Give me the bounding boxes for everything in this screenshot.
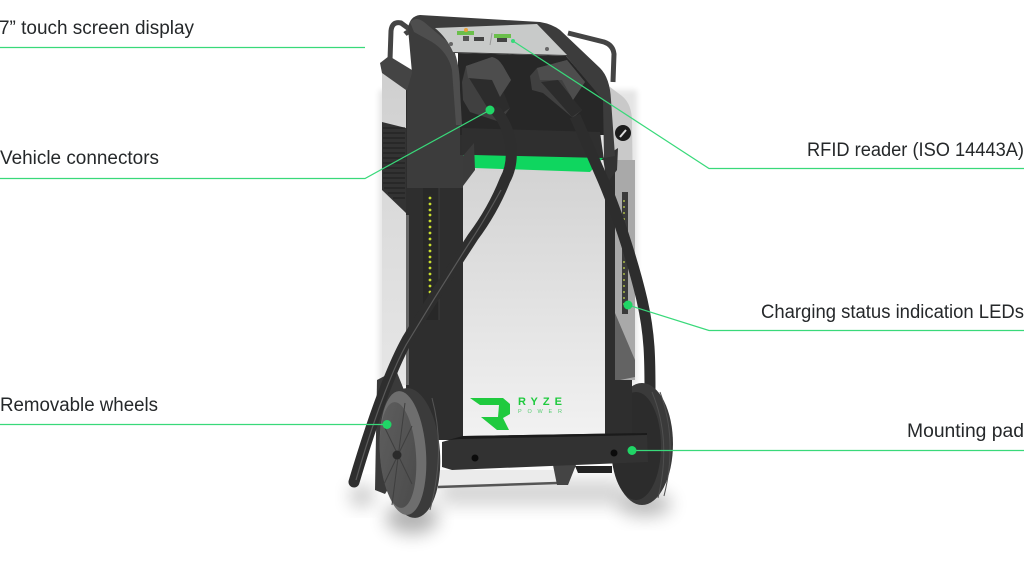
left wheel bracket [375,370,406,494]
callout: mounting pad [628,421,1024,455]
left shoulder [380,56,414,90]
callout: 7" touch screen display: 7” touch screen display [0,18,194,39]
connector bay [458,53,604,135]
logo wordmark: RYZE [518,396,562,408]
callout: removable wheels [0,395,392,429]
right handle [568,33,614,82]
lower right column [605,360,632,436]
side panel: right [604,84,635,380]
callout: mounting pad: Mounting pad [907,421,1024,442]
wheel: left [376,386,444,520]
callout: removable wheels: Removable wheels [0,395,158,416]
front logo: POWER [518,409,562,415]
wheel: right [611,383,673,505]
mounting bar [442,433,648,470]
right dark column [605,165,615,440]
side panel: left [382,70,408,385]
left handle: rear loop [390,23,412,60]
side port [615,125,631,141]
vent grille [382,122,406,213]
cart rail and foot [438,465,612,488]
left handle: front loop [405,32,420,78]
callout: RFID reader [511,39,1024,168]
touch screen panel [435,24,567,55]
left side hook [462,143,475,186]
right side hook [603,148,618,183]
callout: charging status LEDs: Charging status indication LEDs [761,302,1024,323]
top console shell [407,15,615,188]
callout: vehicle connectors [0,106,494,178]
left dark column [406,84,463,440]
charging cable: right [575,116,650,392]
charger product illustration [350,15,673,534]
vehicle connector: left [462,57,511,122]
LED strip: right [622,192,628,314]
logo mark [470,398,510,430]
shell arm highlight [410,19,462,125]
front logo [470,396,562,430]
vehicle connector: right [530,60,585,118]
front panel [463,168,606,440]
green band [474,155,603,172]
ground shadows [350,90,671,534]
charging cable: left [354,112,511,482]
LED strip: left [429,197,431,304]
callout: vehicle connectors: Vehicle connectors [0,148,159,169]
shelf below connectors [462,128,604,160]
callout: charging status LEDs [624,300,1024,330]
